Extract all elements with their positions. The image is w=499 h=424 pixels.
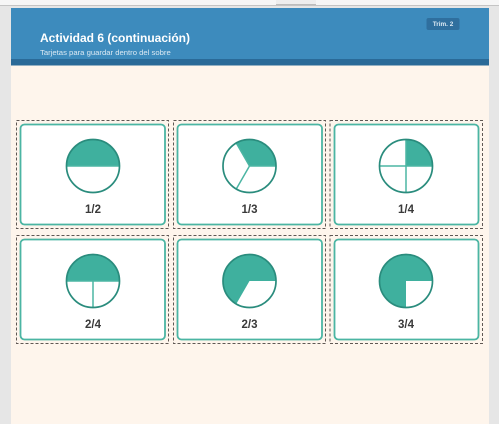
fraction circle: 2/3 (223, 254, 276, 308)
label: 1/4: 1/4 (398, 204, 415, 216)
card: 2/3 (174, 236, 326, 344)
card: 2/4 (16, 236, 168, 344)
label: 2/4: 2/4 (85, 319, 102, 331)
badge: trimester (426, 18, 460, 30)
fraction circle: 2/4 (66, 254, 120, 308)
card: 1/4 (330, 120, 482, 228)
label: 2/3: 2/3 (242, 319, 258, 331)
label: 1/2: 1/2 (85, 204, 101, 216)
title: Actividad 6 (continuación) (40, 31, 190, 45)
label: 1/3: 1/3 (242, 204, 258, 216)
card: 1/3 (174, 120, 326, 228)
card: 3/4 (330, 236, 482, 344)
fraction circle: 3/4 (380, 254, 432, 308)
fraction circle: 1/4 (380, 140, 432, 192)
fraction circle: 1/2 (66, 140, 120, 192)
card: 1/2 (16, 120, 168, 228)
header banner (11, 8, 489, 66)
badge: trimester: Trim. 2 (433, 21, 454, 28)
fraction circle: 1/3 (223, 139, 276, 192)
label: 3/4: 3/4 (398, 319, 415, 331)
subtitle: Tarjetas para guardar dentro del sobre (40, 48, 171, 57)
